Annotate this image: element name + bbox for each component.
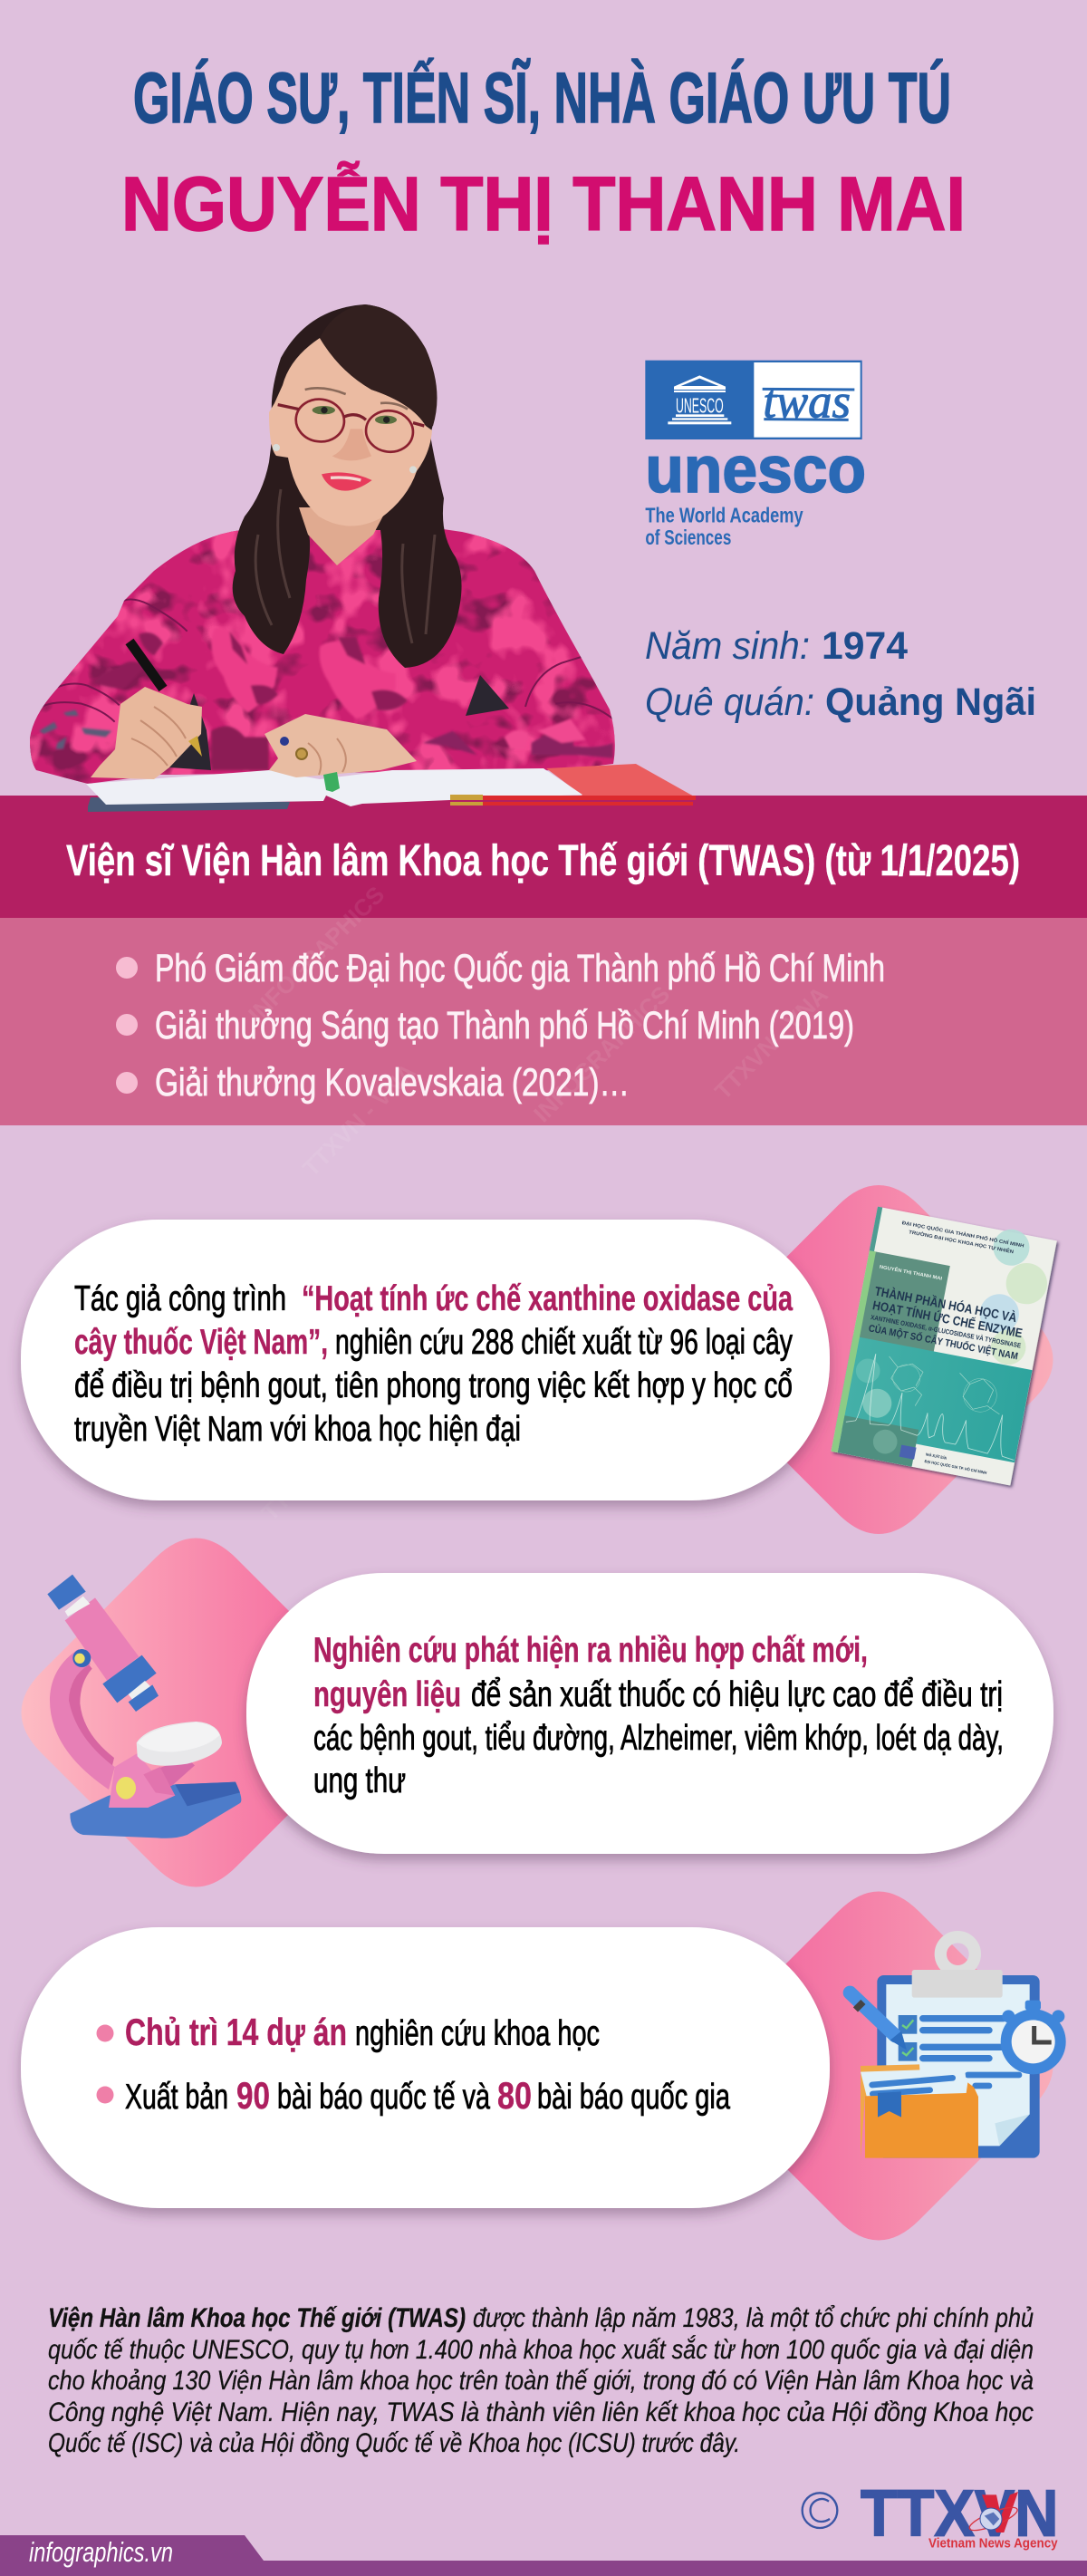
dark gaps under arms — [169, 675, 509, 770]
watermarks — [243, 881, 838, 1526]
text block: about TWAS — [48, 2303, 1034, 2458]
book titles: XANTHINE OXIDASE, α-GLUCOSIDASE VÀ TYROSINASE — [871, 1313, 1022, 1350]
dress — [30, 521, 615, 784]
hometown: Quê quán: — [645, 680, 814, 724]
academy text: The World Academy — [645, 504, 803, 527]
book titles: ĐẠI HỌC QUỐC GIA TP. HỒ CHÍ MINH — [924, 1459, 987, 1475]
twas strokes — [763, 389, 854, 420]
book titles: NHÀ XUẤT BẢN — [926, 1452, 947, 1461]
card text: Nghiên cứu phát hiện ra nhiều hợp chất mới, — [313, 1631, 868, 1670]
achievements list: Giải thưởng Sáng tạo Thành phố Hồ Chí Minh (2019) — [155, 1004, 854, 1047]
open document — [88, 797, 290, 812]
text block: about TWAS: Viện Hàn lâm Khoa học Thế giới (TWAS) — [48, 2303, 466, 2333]
hair — [233, 304, 462, 668]
book titles: CỦA MỘT SỐ CÂY THUỐC VIỆT NAM — [868, 1321, 1019, 1362]
right hand — [265, 714, 417, 777]
logo: TTXVN — [803, 2476, 1058, 2552]
watermarks: TTXVN - VNA — [256, 1402, 380, 1526]
icon: book cover — [831, 1203, 1057, 1486]
panel: book card — [21, 1220, 830, 1500]
hair highlights — [255, 489, 435, 643]
line 2: Xuất bản — [125, 2078, 228, 2117]
card text: nguyên liệu — [313, 1675, 461, 1714]
fringe — [320, 304, 437, 426]
footer site name: infographics.vn — [29, 2536, 173, 2568]
achievements list: Giải thưởng Kovalevskaia (2021)… — [155, 1061, 630, 1105]
title: line 2 name: NGUYỄN THỊ THANH MAI — [121, 161, 966, 246]
facial features and glasses — [273, 388, 424, 491]
logo box — [645, 361, 862, 439]
book titles: TRƯỜNG ĐẠI HỌC KHOA HỌC TỰ NHIÊN — [909, 1228, 1015, 1255]
footer band — [0, 2535, 1087, 2576]
line 2 — [96, 2074, 730, 2117]
pen — [130, 642, 202, 757]
card text: cây thuốc Việt Nam”, — [74, 1323, 328, 1362]
UNESCO temple icon — [668, 375, 731, 424]
card text — [74, 1279, 793, 1449]
card text: “Hoạt tính ức chế xanthine oxidase của — [302, 1279, 793, 1318]
watermarks: INFOGRAPHICS — [528, 980, 675, 1127]
card text: Tác giả công trình — [74, 1279, 286, 1318]
TTXVN letters: TTXVN — [861, 2476, 1058, 2550]
dress floral pattern — [27, 516, 625, 788]
icon: clipboard, pen, clock and folder — [850, 1937, 1066, 2158]
card text — [313, 1631, 1004, 1800]
line 1 — [96, 2011, 600, 2053]
face — [269, 338, 432, 526]
red V accent and globe — [967, 2492, 1020, 2534]
achievements list — [116, 947, 885, 1105]
left hand — [91, 687, 202, 779]
line 1: Chủ trì 14 dự án — [125, 2011, 347, 2053]
spectrum peaks and molecules — [845, 1351, 1028, 1460]
publisher mark — [899, 1445, 917, 1460]
watermarks: INFOGRAPHICS — [243, 881, 390, 1028]
agency name: Vietnam News Agency — [928, 2537, 1058, 2552]
banner: light achievements band — [0, 918, 1087, 1125]
diamond behind book — [705, 1185, 1053, 1534]
line 1: nghiên cứu khoa học — [355, 2014, 600, 2053]
folder spine and clips — [450, 795, 696, 806]
birth year: 1974 — [822, 624, 908, 668]
document pages — [86, 768, 582, 806]
neck — [299, 507, 388, 565]
twas wordmark: twas — [763, 376, 851, 429]
diamond behind microscope — [22, 1539, 370, 1886]
card text: nghiên cứu 288 chiết xuất từ 96 loại cây — [335, 1323, 793, 1362]
finger lines and rings — [131, 707, 346, 775]
card text: để điều trị bệnh gout, tiên phong trong việc kết hợp y học cổ — [74, 1366, 793, 1405]
hometown — [645, 680, 1036, 724]
birth year — [645, 624, 908, 668]
book titles: HOẠT TÍNH ỨC CHẾ ENZYME — [871, 1297, 1024, 1340]
card text: truyền Việt Nam với khoa học hiện đại — [74, 1410, 521, 1449]
green marker — [323, 772, 340, 792]
icon: microscope — [47, 1575, 241, 1838]
red folder — [546, 764, 696, 797]
watermarks: TTXVN - VNA — [709, 980, 833, 1105]
watermarks: TTXVN - VNA — [297, 1057, 421, 1182]
text block: about TWAS: Quốc tế (ISC) và của Hội đồng Quốc tế về Khoa học (ICSU) trước đây. — [48, 2428, 740, 2458]
panel: projects card — [21, 1927, 830, 2208]
portrait of the professor — [27, 304, 696, 812]
line 2: bài báo quốc gia — [537, 2078, 730, 2117]
diamond behind clipboard — [705, 1892, 1053, 2240]
line 2: bài báo quốc tế và — [277, 2078, 490, 2117]
hexagons — [842, 1205, 1056, 1478]
book titles: NGUYỄN THỊ THANH MAI — [879, 1264, 943, 1282]
panel: research card — [246, 1573, 1053, 1854]
line 2: 90 — [236, 2074, 270, 2117]
UNESCO temple icon: UNESCO — [676, 393, 724, 417]
watermarks: INFOGRAPHICS — [691, 1352, 838, 1499]
birth year: Năm sinh: — [645, 624, 810, 668]
book titles — [845, 1216, 1040, 1477]
logo: UNESCO TWAS — [645, 361, 866, 549]
hometown: Quảng Ngãi — [825, 680, 1036, 724]
line 2: 80 — [497, 2074, 532, 2117]
banner: dark academy band — [0, 796, 1087, 918]
copyright symbol — [803, 2493, 837, 2528]
card text: ung thư — [313, 1761, 406, 1800]
book titles: THÀNH PHẦN HÓA HỌC VÀ — [873, 1283, 1018, 1325]
sciences text: of Sciences — [645, 526, 731, 549]
unesco wordmark: unesco — [645, 434, 866, 507]
book titles: ĐẠI HỌC QUỐC GIA THÀNH PHỐ HỒ CHÍ MINH — [901, 1219, 1024, 1249]
